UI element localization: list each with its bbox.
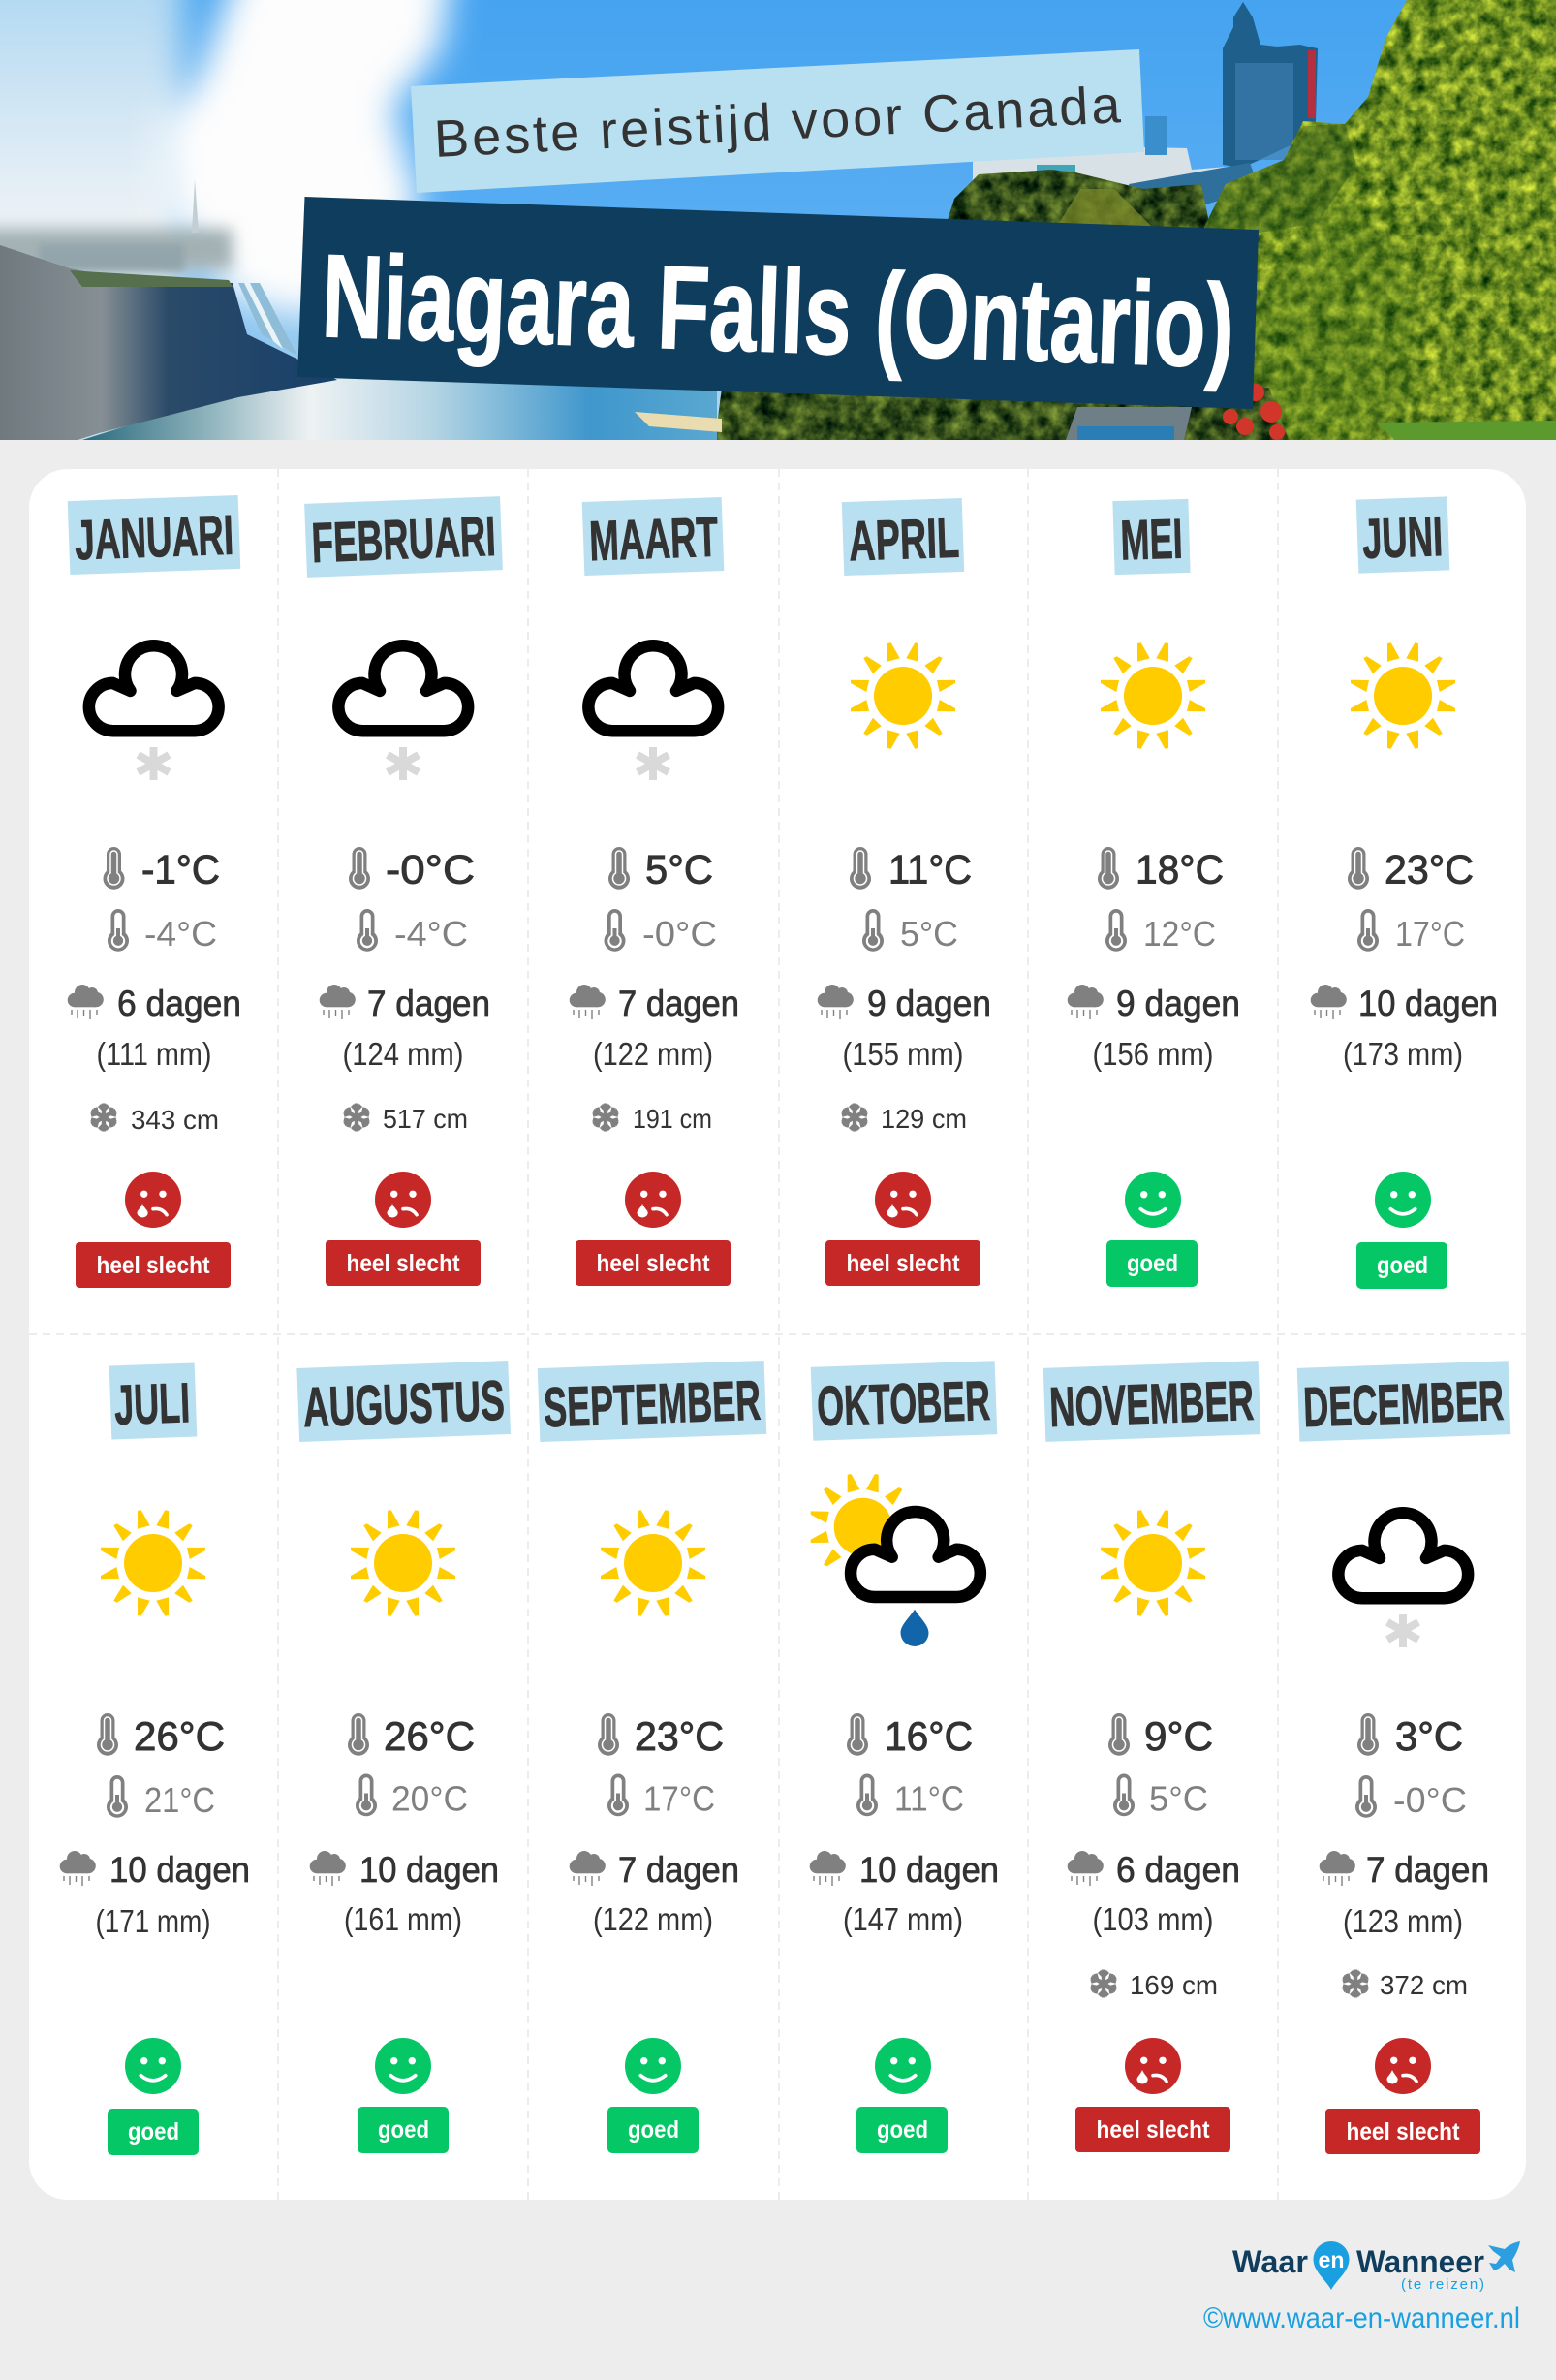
month heading: NOVEMBER (1048, 1369, 1255, 1439)
rating badge (108, 2109, 199, 2155)
month heading: JULI (113, 1371, 191, 1437)
icon: sad face (1375, 2038, 1431, 2094)
panel: maart (570, 497, 739, 1286)
icon: max thermometer (97, 1713, 118, 1756)
month heading (68, 495, 240, 575)
min temperature: -0°C (642, 914, 717, 954)
max temperature: 9°C (1144, 1713, 1213, 1759)
panel: oktober (810, 1361, 999, 2153)
rating badge: goed (1377, 1252, 1428, 1279)
rating badge: heel slecht (1097, 2116, 1210, 2144)
rating badge (576, 1240, 731, 1286)
panel: april (818, 498, 991, 1286)
icon: max thermometer (598, 1713, 619, 1756)
icon: happy face (1375, 1172, 1431, 1228)
rating badge (607, 2107, 699, 2153)
icon: sad face (375, 1172, 431, 1228)
min temperature: 12°C (1143, 914, 1216, 954)
icon: snowflake (388, 747, 419, 780)
icon: sad face (875, 1172, 931, 1228)
icon: rain (1311, 985, 1347, 1019)
rating badge (326, 1240, 481, 1286)
panel: januari (68, 495, 241, 1288)
logo: Waar en Wanneer: en (1318, 2247, 1345, 2272)
logo: Waar en Wanneer: Waar (1232, 2244, 1308, 2279)
website url: ©www.waar-en-wanneer.nl (1203, 2302, 1520, 2334)
icon: max thermometer (1108, 1713, 1130, 1756)
min temperature: 17°C (1395, 914, 1465, 954)
min temperature: 17°C (643, 1779, 715, 1818)
icon: happy face (875, 2038, 931, 2094)
max temperature: 16°C (885, 1713, 973, 1759)
max temperature: 3°C (1395, 1713, 1463, 1759)
icon: rain (1320, 1851, 1355, 1886)
icon: min thermometer (1355, 1775, 1377, 1818)
icon: rain (1068, 1851, 1104, 1886)
rain amount: (161 mm) (344, 1901, 462, 1937)
rating badge: goed (128, 2118, 179, 2145)
rating badge (1356, 1242, 1447, 1289)
month heading (538, 1361, 766, 1442)
rain amount: (124 mm) (343, 1036, 463, 1072)
min temperature: 5°C (1149, 1779, 1208, 1818)
rain days: 6 dagen (117, 984, 241, 1023)
icon: max thermometer (847, 1713, 868, 1756)
icon: sun behind cloud (811, 1474, 916, 1580)
rain amount: (147 mm) (843, 1901, 963, 1937)
icon: sun (101, 1510, 205, 1616)
icon: snowflake (638, 747, 669, 780)
icon: rain (818, 985, 854, 1019)
rain days: 7 dagen (618, 984, 739, 1023)
rain amount: (122 mm) (593, 1036, 713, 1072)
icon: min thermometer (1113, 1773, 1135, 1816)
min temperature: 20°C (391, 1779, 468, 1818)
icon: rain (570, 985, 606, 1019)
rating badge: heel slecht (597, 1250, 710, 1277)
rain amount: (111 mm) (97, 1036, 211, 1072)
rating badge: heel slecht (347, 1250, 460, 1277)
rain amount: (123 mm) (1343, 1903, 1463, 1939)
icon: min thermometer (1105, 909, 1127, 952)
rain days: 6 dagen (1116, 1850, 1240, 1890)
month heading (304, 496, 503, 578)
icon: sad face (1125, 2038, 1181, 2094)
rating badge (358, 2107, 449, 2153)
white card panel (29, 469, 1526, 2200)
icon: max thermometer (103, 847, 124, 890)
icon: snow (89, 1103, 118, 1132)
icon: sun (601, 1510, 705, 1616)
icon: rain drop (901, 1610, 928, 1646)
icon: cloud (1338, 1513, 1468, 1598)
rain days: 10 dagen (359, 1850, 499, 1890)
max temperature: 26°C (134, 1713, 225, 1759)
icon: map pin (1314, 2241, 1349, 2290)
rating badge (825, 1240, 980, 1286)
icon: max thermometer (850, 847, 871, 890)
icon: sun (351, 1510, 455, 1616)
month heading (1043, 1361, 1260, 1442)
subtitle text: Beste reistijd voor Canada (433, 76, 1123, 169)
icon: snow (591, 1103, 620, 1132)
icon: rain (60, 1851, 96, 1886)
month heading (582, 497, 724, 576)
title text: Niagara Falls (Ontario) (320, 230, 1236, 392)
banner photo: Niagara Falls (0, 0, 1556, 440)
snow amount: 517 cm (383, 1104, 468, 1134)
panel: juni (1311, 496, 1498, 1289)
max temperature: 11°C (888, 847, 972, 892)
rating badge (1106, 1240, 1198, 1287)
rating badge: heel slecht (97, 1252, 210, 1279)
snow amount: 372 cm (1380, 1970, 1468, 2000)
panel: september (538, 1361, 766, 2153)
icon: happy face (125, 2038, 181, 2094)
icon: rain (1068, 985, 1104, 1019)
snow amount: 343 cm (131, 1105, 219, 1135)
logo: Waar en Wanneer (1232, 2241, 1520, 2293)
panel: november (1043, 1361, 1260, 2152)
icon: happy face (375, 2038, 431, 2094)
rating badge: goed (877, 2116, 928, 2144)
rain amount: (103 mm) (1093, 1901, 1213, 1937)
rain days: 7 dagen (618, 1850, 739, 1890)
icon: airplane (1488, 2241, 1520, 2272)
icon: rain (570, 1851, 606, 1886)
snow amount: 129 cm (881, 1104, 967, 1134)
icon: sad face (625, 1172, 681, 1228)
rain amount: (155 mm) (843, 1036, 963, 1072)
max temperature: 26°C (384, 1713, 475, 1759)
icon: snow (342, 1103, 371, 1132)
month heading: APRIL (848, 507, 960, 573)
logo: Waar en Wanneer: (te reizen) (1401, 2276, 1484, 2293)
rating badge: heel slecht (1347, 2118, 1460, 2145)
icon: rain (310, 1851, 346, 1886)
month heading: FEBRUARI (310, 505, 497, 575)
min temperature: 5°C (900, 914, 958, 954)
icon: rain (810, 1851, 846, 1886)
panel: mei (1068, 499, 1240, 1287)
month heading: MEI (1120, 508, 1184, 572)
icon: sad face (125, 1172, 181, 1228)
month heading: JUNI (1361, 505, 1444, 571)
title strip (297, 197, 1259, 409)
icon: sun (851, 642, 955, 749)
icon: happy face (625, 2038, 681, 2094)
icon: cloud (89, 645, 219, 731)
rating badge (1325, 2109, 1480, 2154)
max temperature: -1°C (141, 847, 220, 892)
icon: min thermometer (605, 909, 626, 952)
max temperature: 23°C (1385, 847, 1474, 892)
icon: min thermometer (108, 909, 129, 952)
rating badge: goed (378, 2116, 429, 2144)
icon: min thermometer (1357, 909, 1379, 952)
panel: december (1297, 1361, 1510, 2154)
icon: max thermometer (1098, 847, 1119, 890)
max temperature: -0°C (386, 847, 475, 892)
subtitle strip (411, 49, 1144, 193)
rating badge (1075, 2107, 1230, 2152)
icon: happy face (1125, 1172, 1181, 1228)
panel: juli (60, 1362, 250, 2155)
rain amount: (156 mm) (1093, 1036, 1213, 1072)
icon: min thermometer (856, 1773, 878, 1816)
month heading: SEPTEMBER (543, 1369, 762, 1439)
month heading: MAART (588, 506, 719, 573)
month heading: JANUARI (74, 504, 234, 572)
month heading: OKTOBER (816, 1369, 991, 1438)
icon: max thermometer (608, 847, 630, 890)
icon: snow (840, 1103, 869, 1132)
icon: rain (68, 985, 104, 1019)
rain days: 7 dagen (367, 984, 490, 1023)
month heading (296, 1361, 511, 1442)
month heading (811, 1361, 997, 1441)
month heading (1112, 499, 1191, 575)
month heading (842, 498, 964, 576)
panel: februari (304, 496, 503, 1286)
rating badge (76, 1242, 231, 1288)
rain amount: (171 mm) (95, 1903, 211, 1939)
min temperature: 11°C (894, 1779, 964, 1818)
snow amount: 169 cm (1130, 1970, 1218, 2000)
icon: snowflake (1387, 1614, 1418, 1647)
max temperature: 5°C (645, 847, 713, 892)
icon: cloud (338, 645, 468, 731)
rain days: 9 dagen (867, 984, 991, 1023)
icon: min thermometer (607, 1773, 629, 1816)
max temperature: 23°C (635, 1713, 724, 1759)
min temperature: 21°C (144, 1780, 215, 1820)
icon: sun (1351, 642, 1455, 749)
rain amount: (173 mm) (1343, 1036, 1463, 1072)
rain days: 9 dagen (1116, 984, 1240, 1023)
icon: max thermometer (1348, 847, 1369, 890)
logo: Waar en Wanneer: Wanneer (1356, 2244, 1484, 2279)
icon: cloud (588, 645, 718, 731)
icon: sun (1101, 1510, 1205, 1616)
min temperature: -0°C (1393, 1780, 1467, 1820)
icon: cloud (851, 1512, 980, 1597)
rating badge: goed (1127, 1250, 1178, 1277)
rating badge: goed (628, 2116, 679, 2144)
rating badge: heel slecht (847, 1250, 960, 1277)
snow amount: 191 cm (633, 1104, 712, 1134)
min temperature: -4°C (144, 914, 217, 954)
rain days: 10 dagen (1358, 984, 1498, 1023)
month heading (109, 1362, 197, 1440)
month heading (1356, 496, 1449, 574)
rating badge (856, 2107, 948, 2153)
icon: snowflake (138, 747, 169, 780)
rain days: 10 dagen (859, 1850, 999, 1890)
icon: snow (1341, 1969, 1370, 1998)
icon: rain (320, 985, 356, 1019)
icon: sun (1101, 642, 1205, 749)
icon: min thermometer (356, 1773, 377, 1816)
icon: max thermometer (1357, 1713, 1379, 1756)
min temperature: -4°C (394, 914, 468, 954)
icon: max thermometer (349, 847, 370, 890)
max temperature: 18°C (1136, 847, 1224, 892)
icon: min thermometer (107, 1775, 128, 1818)
icon: snow (1089, 1969, 1118, 1998)
icon: min thermometer (862, 909, 884, 952)
month heading: AUGUSTUS (302, 1369, 506, 1439)
icon: max thermometer (348, 1713, 369, 1756)
rain amount: (122 mm) (593, 1901, 713, 1937)
rain days: 10 dagen (109, 1850, 250, 1890)
icon: min thermometer (357, 909, 378, 952)
panel: augustus (296, 1361, 511, 2153)
rain days: 7 dagen (1366, 1850, 1489, 1890)
